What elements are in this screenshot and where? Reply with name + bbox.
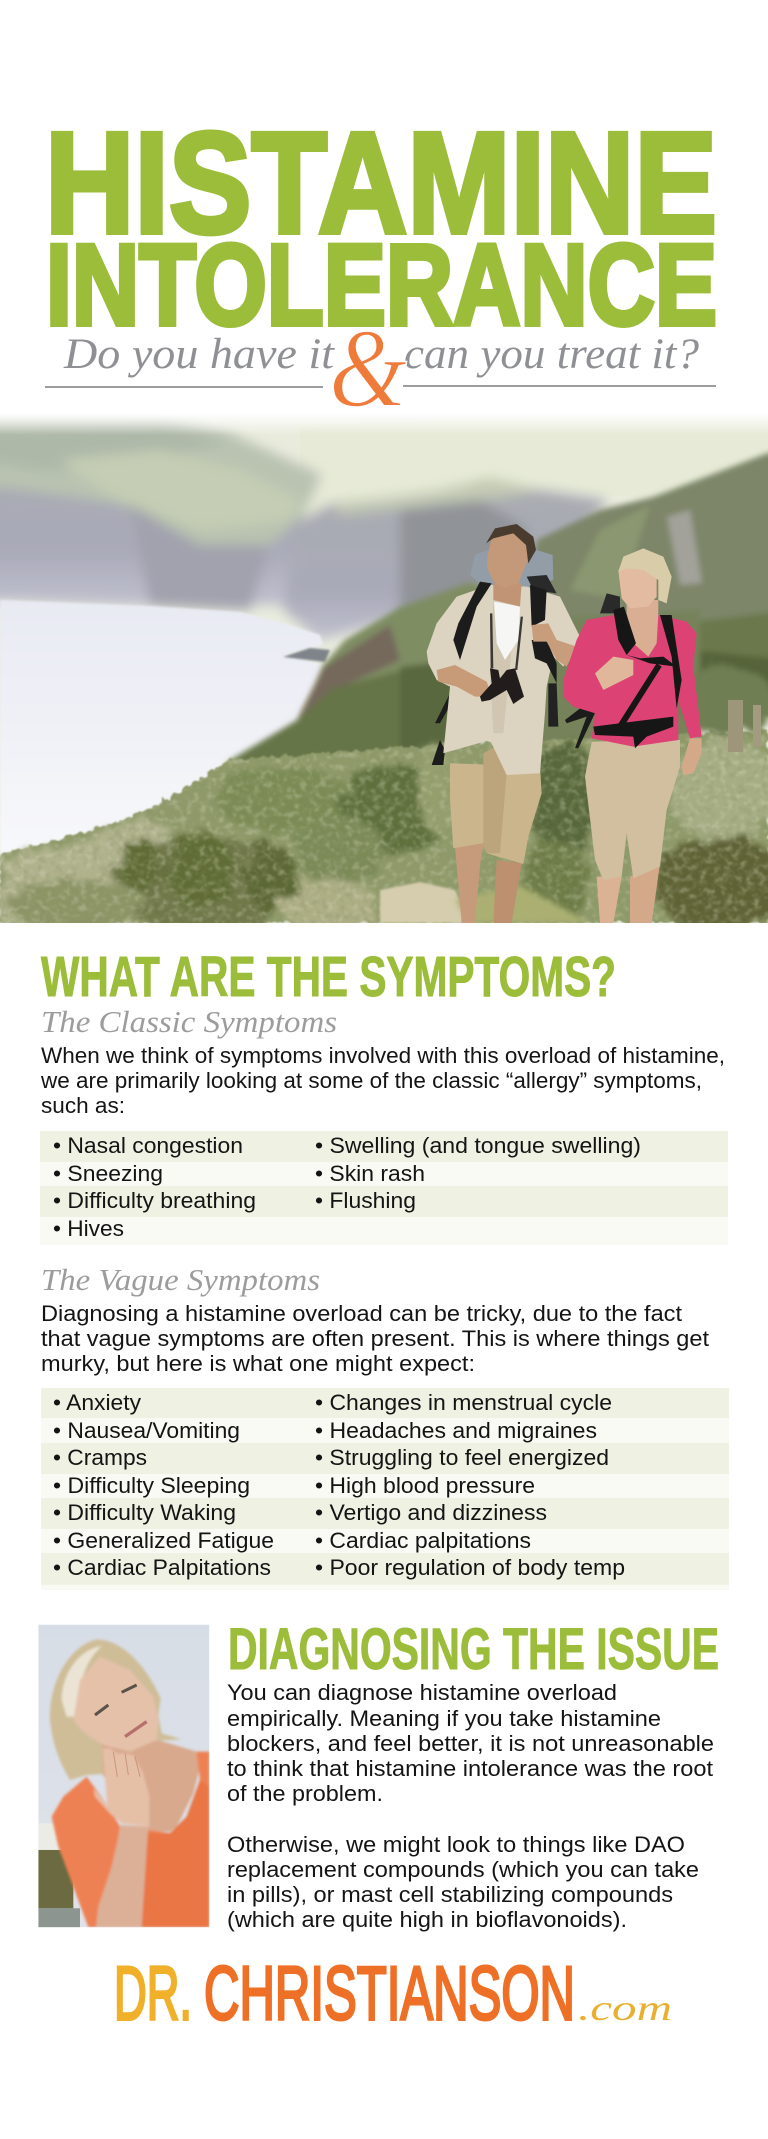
- paragraph: empirical diagnosis: of the problem.: [227, 1781, 383, 1806]
- table: vague symptoms list: • Difficulty Sleeping: [53, 1473, 250, 1498]
- fence posts: [728, 700, 743, 752]
- section: what are the symptoms: [40, 945, 729, 1590]
- tagline: do you have it and can you treat it: can you treat it?: [404, 331, 700, 378]
- paragraph: classic symptoms intro: we are primarily looking at some of the classic “allergy” symptoms,: [40, 1068, 702, 1093]
- tagline: do you have it and can you treat it: &: [329, 307, 407, 431]
- paragraph: empirical diagnosis: You can diagnose histamine overload: [227, 1680, 617, 1705]
- paragraph: vague symptoms intro: Diagnosing a histamine overload can be tricky, due to the fact: [41, 1301, 683, 1326]
- table: classic symptoms list: • Difficulty breathing: [53, 1188, 256, 1213]
- paragraph: DAO and mast cell compounds: [227, 1832, 699, 1932]
- paragraph: empirical diagnosis: to think that histamine intolerance was the root: [227, 1756, 714, 1781]
- water: [0, 600, 323, 895]
- paragraph: vague symptoms intro: murky, but here is what one might expect:: [41, 1351, 475, 1376]
- table: vague symptoms list: • Nausea/Vomiting: [53, 1418, 240, 1443]
- table: classic symptoms list: • Nasal congestion: [53, 1133, 243, 1158]
- paragraph: empirical diagnosis: [227, 1680, 714, 1806]
- paragraph: vague symptoms intro: that vague symptoms are often present. This is where things get: [41, 1326, 710, 1351]
- title: Histamine Intolerance: [45, 102, 717, 350]
- paragraph: DAO and mast cell compounds: replacement compounds (which you can take: [227, 1857, 699, 1882]
- paragraph: vague symptoms intro: [41, 1301, 710, 1376]
- paragraph: classic symptoms intro: When we think of symptoms involved with this overload of histamine,: [41, 1043, 725, 1068]
- paragraph: classic symptoms intro: [40, 1043, 725, 1118]
- logo: Dr. Christianson .com: CHRISTIANSON: [204, 1952, 575, 2036]
- table: vague symptoms list: • Cramps: [53, 1445, 147, 1470]
- table: classic symptoms list: • Flushing: [315, 1188, 416, 1213]
- table: vague symptoms list: • Difficulty Waking: [53, 1500, 236, 1525]
- table: vague symptoms list: • Cardiac Palpitations: [53, 1555, 271, 1580]
- table: vague symptoms list: • Struggling to feel energized: [315, 1445, 609, 1470]
- table: vague symptoms list: • Cardiac palpitations: [315, 1528, 531, 1553]
- table: vague symptoms list: • Anxiety: [53, 1390, 142, 1415]
- table: vague symptoms list: • High blood pressure: [315, 1473, 535, 1498]
- woman hiker: [563, 548, 702, 923]
- table: vague symptoms list: [41, 1388, 729, 1590]
- table: classic symptoms list: • Sneezing: [53, 1161, 163, 1186]
- table: classic symptoms list: • Swelling (and tongue swelling): [315, 1133, 641, 1158]
- tagline: do you have it and can you treat it: Do you have it: [63, 331, 335, 378]
- paragraph: empirical diagnosis: blockers, and feel better, it is not unreasonable: [227, 1731, 714, 1756]
- foreground bushes: [0, 730, 768, 923]
- tagline: do you have it and can you treat it: [45, 307, 716, 431]
- paragraph: classic symptoms intro: such as:: [41, 1093, 125, 1118]
- table: classic symptoms list: [40, 1131, 728, 1245]
- paragraph: DAO and mast cell compounds: (which are quite high in bioflavonoids).: [227, 1907, 627, 1932]
- table: classic symptoms list: • Hives: [53, 1216, 124, 1241]
- table: vague symptoms list: • Headaches and migraines: [315, 1418, 597, 1443]
- table: vague symptoms list: • Poor regulation of body temp: [315, 1555, 625, 1580]
- section: diagnosing the issue: [227, 1617, 719, 1932]
- paragraph: DAO and mast cell compounds: Otherwise, we might look to things like DAO: [227, 1832, 685, 1857]
- table: vague symptoms list: • Vertigo and dizziness: [315, 1500, 547, 1525]
- table: vague symptoms list: • Changes in menstrual cycle: [315, 1390, 612, 1415]
- hero photo: couple hiking on coastal cliffs: [0, 410, 768, 935]
- man hiker: [427, 524, 580, 923]
- logo: Dr. Christianson .com: DR.: [114, 1952, 192, 2036]
- subheading: the vague symptoms: The Vague Symptoms: [41, 1262, 320, 1297]
- paragraph: empirical diagnosis: empirically. Meaning if you take histamine: [227, 1706, 661, 1731]
- subheading: the classic symptoms: The Classic Symptoms: [41, 1004, 337, 1039]
- paragraph: DAO and mast cell compounds: in pills), or mast cell stabilizing compounds: [227, 1882, 673, 1907]
- logo: Dr. Christianson .com: .com: [578, 1988, 672, 2028]
- table: vague symptoms list: • Generalized Fatigue: [53, 1528, 274, 1553]
- photo: woman touching her throat: [38, 1625, 209, 1927]
- hillsides: [227, 453, 768, 770]
- table: classic symptoms list: • Skin rash: [315, 1161, 425, 1186]
